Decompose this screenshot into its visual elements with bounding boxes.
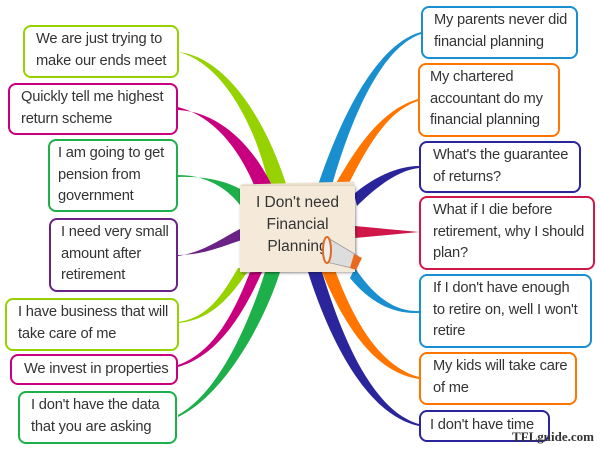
branch: green 1	[178, 175, 245, 205]
box: left 3	[48, 139, 178, 212]
icon: megaphone	[322, 236, 362, 270]
box: right 7	[419, 410, 550, 442]
box: left 7: I don't have the data	[31, 397, 159, 413]
branch: crimson	[355, 226, 419, 238]
watermark: TFLguide.com	[512, 429, 594, 444]
box: left 2: Quickly tell me highest	[21, 89, 163, 105]
box: right 1: financial planning	[434, 34, 544, 50]
box: right 4: plan?	[433, 245, 468, 261]
box: right 2: financial planning	[430, 112, 540, 128]
box: left 5: take care of me	[18, 326, 116, 342]
box: right 7: I don't have time	[430, 417, 534, 433]
box: right 5: to retire on, well I won't	[433, 302, 578, 318]
box: right 3	[419, 141, 581, 193]
box: left 6	[10, 354, 178, 385]
branch: purple	[178, 228, 242, 256]
box: right 1	[421, 6, 578, 59]
box: left 5: I have business that will	[18, 304, 168, 320]
box: right 5	[419, 274, 592, 348]
center note: I Don't need	[256, 194, 339, 211]
box: left 4: retirement	[61, 267, 125, 283]
branch: magenta 2	[178, 272, 262, 367]
branch: magenta 1	[178, 107, 274, 195]
box: right 5: retire	[433, 323, 465, 339]
branch: orange 2	[322, 270, 419, 379]
box: right 6	[419, 352, 577, 405]
box: left 4: I need very small	[61, 224, 169, 240]
box: left 2: return scheme	[21, 110, 112, 126]
box: left 3: I am going to get	[58, 145, 164, 161]
box: right 1: My parents never did	[434, 12, 567, 28]
branch: indigo 1	[354, 166, 419, 206]
box: left 1	[23, 25, 179, 78]
box: right 6: of me	[433, 380, 469, 396]
box: left 1: make our ends meet	[36, 52, 166, 68]
center note: Planning	[267, 238, 328, 255]
box: left 2	[8, 83, 178, 135]
box: right 4: What if I die before	[433, 202, 552, 218]
box: right 3: of returns?	[433, 168, 501, 184]
box: left 5	[5, 298, 179, 351]
center note: Financial	[266, 216, 329, 233]
branch: green 2	[178, 272, 280, 417]
box: left 3: pension from	[58, 166, 141, 182]
box: right 6: My kids will take care	[433, 358, 567, 374]
box: left 6: We invest in properties	[24, 361, 169, 377]
branch: orange 1	[335, 99, 418, 185]
box: right 3: What's the guarantee	[433, 147, 568, 163]
box: right 2	[418, 63, 560, 137]
box: right 2: My chartered	[430, 69, 513, 85]
branch: blue 2	[350, 268, 419, 313]
branch: blue 1	[318, 32, 421, 185]
box: right 4: retirement, why I should	[433, 224, 584, 240]
box: right 4	[419, 196, 595, 270]
branch: indigo 2	[308, 272, 419, 426]
box: left 3: government	[58, 188, 134, 204]
box: left 1: We are just trying to	[36, 31, 162, 47]
box: left 7: that you are asking	[31, 418, 151, 434]
branch: lime 2	[178, 268, 250, 323]
box: right 5: If I don't have enough	[433, 280, 569, 296]
box: left 4: amount after	[61, 246, 141, 262]
box: right 2: accountant do my	[430, 90, 543, 106]
center note	[239, 181, 362, 276]
branch: lime 1	[178, 52, 288, 190]
box: left 4	[49, 218, 178, 292]
box: left 7	[18, 391, 177, 444]
